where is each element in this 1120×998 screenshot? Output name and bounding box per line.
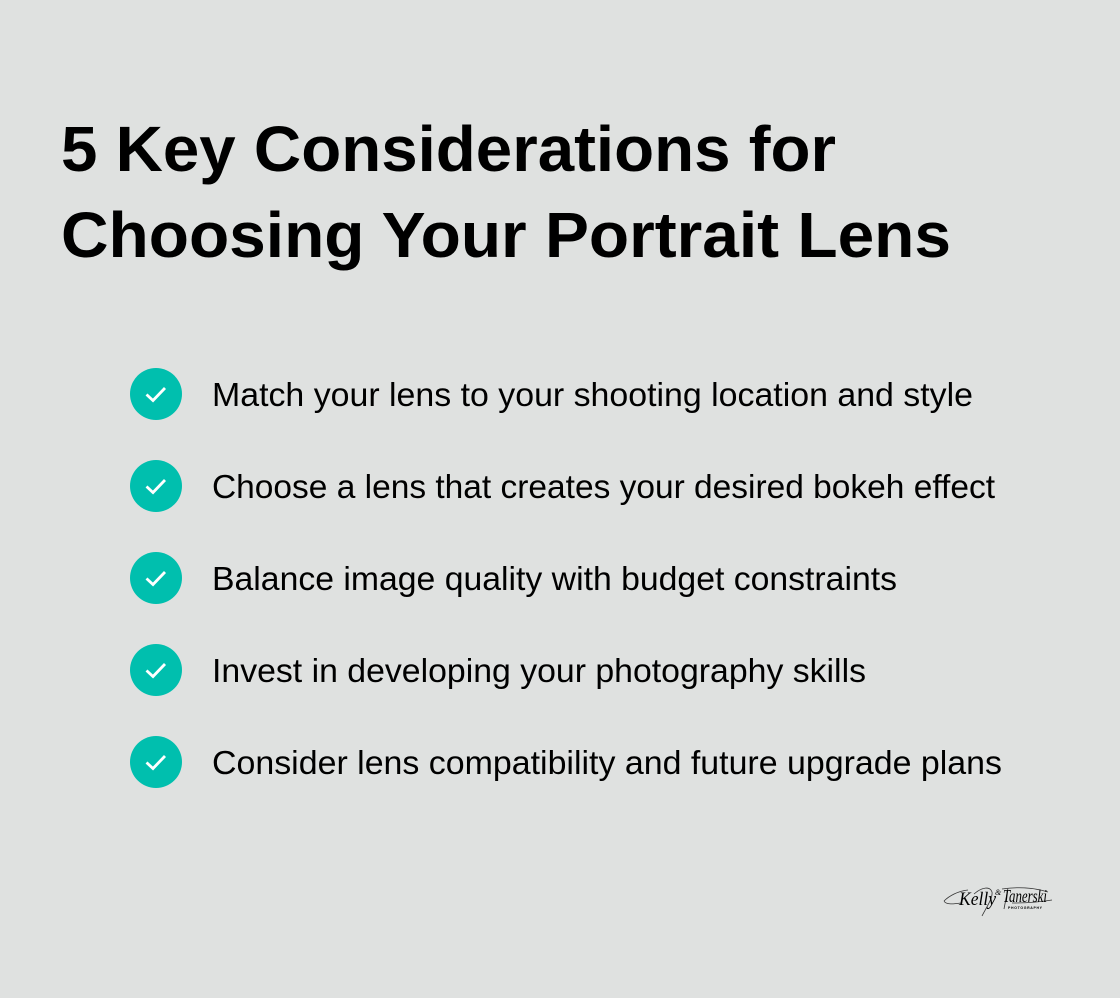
item 5: compatibility and upgrades: Consider lens compatibility and future upgrade plans bbox=[212, 744, 1002, 781]
logo: signature: Tanerski bbox=[1003, 886, 1047, 906]
logo: signature bbox=[944, 886, 1052, 916]
logo: signature: Kelly bbox=[958, 889, 997, 910]
item 4: photography skills bbox=[130, 644, 866, 696]
checklist bbox=[130, 368, 1002, 788]
title bbox=[61, 113, 951, 271]
item 2: desired bokeh effect: Choose a lens that creates your desired bokeh effect bbox=[212, 468, 995, 505]
logo: signature: PHOTOGRAPHY bbox=[1008, 906, 1043, 910]
item 4: photography skills: Invest in developing your photography skills bbox=[212, 652, 866, 689]
item 3: quality and budget: Balance image quality with budget constraints bbox=[212, 560, 897, 597]
item 5: compatibility and upgrades bbox=[130, 736, 1002, 788]
title: 5 Key Considerations for bbox=[61, 113, 836, 185]
item 3: quality and budget bbox=[130, 552, 897, 604]
title: Choosing Your Portrait Lens bbox=[61, 199, 951, 271]
item 1: match lens to location and style bbox=[130, 368, 973, 420]
logo: signature: & bbox=[995, 888, 1002, 897]
item 1: match lens to location and style: Match your lens to your shooting location and style bbox=[212, 376, 973, 413]
item 2: desired bokeh effect bbox=[130, 460, 995, 512]
